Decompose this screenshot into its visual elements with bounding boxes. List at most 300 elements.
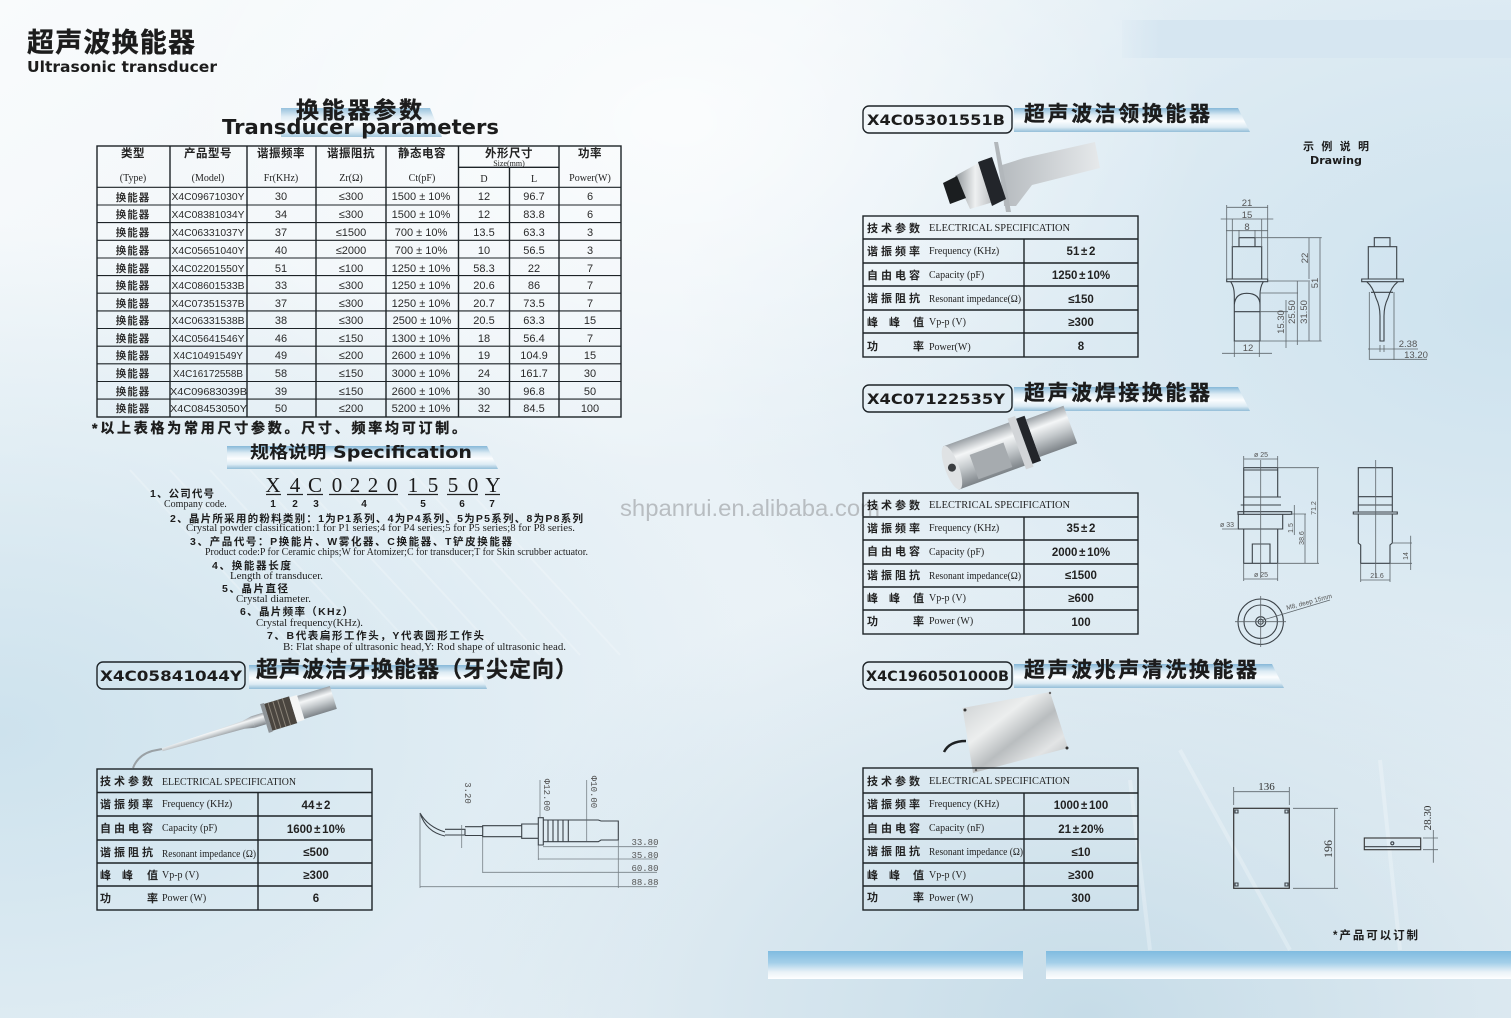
electrical specification table: Vp-p (V): [162, 870, 199, 881]
table rows: 换能器: [116, 297, 150, 310]
electrical specification table: 技术参数: [867, 498, 920, 512]
table rows: 12: [478, 209, 490, 221]
electrical specification table: 技术参数: [867, 221, 920, 235]
dimension drawing: [1221, 198, 1428, 361]
table grid: [97, 146, 621, 417]
electrical specification table: [863, 493, 1138, 634]
table rows: 56.5: [523, 245, 545, 257]
table header: [120, 146, 611, 185]
electrical specification table: Frequency (KHz): [929, 523, 999, 534]
panel: X4C05301551B: [863, 103, 1428, 361]
dimension drawing: [1234, 781, 1438, 888]
model code letters: [265, 473, 501, 497]
table rows: 7: [587, 333, 593, 345]
heading: 超声波洁牙换能器（牙尖定向）: [256, 657, 577, 682]
specification notes: Product code:P for Ceramic chips;W for Atomizer;C for transducer;T for Skin scrubber actuator.: [205, 547, 588, 558]
electrical specification table: 1600 ± 10%: [287, 824, 345, 836]
dimension drawing: 21.6: [1370, 573, 1384, 580]
electrical specification table: [863, 768, 1138, 910]
table rows: 104.9: [520, 350, 548, 362]
model code indexes: 1: [270, 499, 276, 510]
specification notes: 6、晶片频率（KHz）: [240, 605, 353, 618]
model pill: [863, 385, 1012, 412]
watermark: shpanrui.en.alibaba.com: [620, 495, 880, 521]
drawing caption: [1303, 139, 1369, 167]
table header: 外形尺寸: [485, 146, 533, 160]
specification notes: 7、B代表扁形工作头，Y代表圆形工作头: [267, 629, 484, 642]
table rows: 39: [275, 386, 287, 398]
electrical specification table: 技术参数: [100, 774, 153, 788]
electrical specification table: 峰峰值: [867, 315, 924, 329]
dimension drawing: 13.20: [1404, 350, 1428, 361]
model code letters: 4: [290, 473, 301, 497]
model code indexes: 4: [361, 499, 367, 510]
parameters table: [97, 146, 621, 417]
table rows: X4C09671030Y: [172, 191, 244, 203]
dimension drawing: 22: [1300, 253, 1311, 263]
table rows: 50: [584, 386, 596, 398]
table rows: X4C08453050Y: [170, 403, 247, 415]
table rows: 15: [584, 315, 596, 327]
table rows: 46: [275, 333, 287, 345]
heading: 超声波兆声清洗换能器: [1024, 659, 1257, 682]
table rows: 19: [478, 350, 490, 362]
electrical specification table: ≥300: [1068, 870, 1094, 882]
table rows: 100: [581, 403, 599, 415]
electrical specification table: ≤150: [1068, 294, 1094, 306]
dimension drawing: 15: [1242, 210, 1252, 221]
table rows: 换能器: [116, 402, 150, 415]
table rows: 7: [587, 298, 593, 310]
model pill: [97, 662, 245, 689]
table rows: X4C06331037Y: [172, 227, 244, 239]
table rows: 96.8: [523, 386, 545, 398]
electrical specification table: 44 ± 2: [302, 800, 330, 812]
table rows: 86: [528, 280, 540, 292]
table rows: X4C05651040Y: [172, 245, 244, 257]
table rows: 换能器: [116, 279, 150, 292]
title chinese: 超声波换能器: [27, 28, 195, 58]
electrical specification table: 自由电容: [100, 821, 153, 835]
table rows: ≤300: [339, 191, 363, 203]
table rows: X4C05641546Y: [172, 333, 244, 345]
table rows: ≤300: [339, 209, 363, 221]
dimension drawing: [1220, 452, 1412, 647]
table rows: ≤150: [339, 386, 363, 398]
electrical specification table: Vp-p (V): [929, 593, 966, 604]
table rows: 1250 ± 10%: [392, 298, 451, 310]
table rows: ≤1500: [336, 227, 366, 239]
electrical specification table: 谐振频率: [867, 244, 920, 258]
table rows: X4C09683039B: [170, 386, 247, 398]
heading: 超声波焊接换能器: [1024, 382, 1210, 405]
dimension drawing: 136: [1258, 781, 1275, 793]
specification notes: 4、换能器长度: [212, 559, 292, 572]
electrical specification table: 35 ± 2: [1067, 523, 1095, 535]
table rows: 37: [275, 227, 287, 239]
electrical specification table: 1000 ± 100: [1054, 800, 1108, 812]
model code indexes: [270, 499, 495, 510]
table rows: 换能器: [116, 262, 150, 275]
electrical specification table: 谐振阻抗: [867, 844, 920, 858]
table header: Fr(KHz): [264, 173, 298, 184]
table rows: 1250 ± 10%: [392, 280, 451, 292]
heading english: Transducer parameters: [222, 115, 499, 139]
electrical specification table: 8: [1078, 341, 1085, 353]
dimension drawing: 8: [1244, 222, 1250, 233]
dimension drawing: 38.6: [1299, 531, 1306, 545]
photo: welding transducer: [936, 399, 1080, 495]
electrical specification table: ELECTRICAL SPECIFICATION: [929, 500, 1070, 511]
model code breakdown: [265, 473, 501, 510]
table header: Size(mm): [493, 159, 525, 168]
table rows: 换能器: [116, 332, 150, 345]
model code letters: 2: [350, 473, 360, 497]
table rows: 63.3: [523, 227, 545, 239]
model code letters: X: [265, 473, 281, 497]
model code indexes: 7: [489, 499, 495, 510]
model code letters: 0: [468, 473, 478, 497]
table rows: 1500 ± 10%: [392, 209, 451, 221]
dimension drawing: [420, 776, 659, 888]
table rows: ≤300: [339, 298, 363, 310]
table header: 静态电容: [398, 146, 446, 160]
electrical specification table: 100: [1071, 617, 1091, 629]
drawing caption: Drawing: [1310, 154, 1362, 167]
electrical specification table: 自由电容: [867, 268, 920, 282]
table header: Ct(pF): [409, 173, 435, 184]
electrical specification table: ≥300: [1068, 317, 1094, 329]
heading swoosh: [1014, 108, 1250, 132]
electrical specification table: Power (W): [162, 893, 206, 904]
model pill: X4C1960501000B: [866, 669, 1009, 685]
table rows: 32: [478, 403, 490, 415]
table rows: X4C06331538B: [172, 315, 244, 327]
table rows: 换能器: [116, 208, 150, 221]
dimension drawing: 35.80: [631, 851, 659, 861]
electrical specification table: 谐振频率: [100, 797, 153, 811]
table rows: 58.3: [473, 263, 495, 275]
electrical specification table: Capacity (pF): [929, 270, 984, 281]
table rows: 20.6: [473, 280, 495, 292]
table rows: 84.5: [523, 403, 545, 415]
dimension drawing: Φ12.00: [541, 779, 551, 811]
table rows: 30: [275, 191, 287, 203]
dimension drawing: 28.30: [1422, 805, 1434, 830]
table rows: 7: [587, 280, 593, 292]
dimension drawing: M8, deep 15mm: [1286, 593, 1333, 612]
table rows: 换能器: [116, 226, 150, 239]
electrical specification table: Frequency (KHz): [162, 799, 232, 810]
electrical specification table: 21 ± 20%: [1058, 824, 1104, 836]
electrical specification table: ELECTRICAL SPECIFICATION: [929, 776, 1070, 787]
table rows: 1250 ± 10%: [392, 263, 451, 275]
electrical specification table: Capacity (pF): [929, 547, 984, 558]
heading swoosh: [281, 108, 442, 137]
heading swoosh: [1014, 387, 1250, 411]
specification title: 规格说明 Specification: [250, 443, 472, 463]
electrical specification table: ELECTRICAL SPECIFICATION: [162, 777, 296, 788]
electrical specification table: Resonant impedance(Ω): [929, 571, 1021, 582]
specification notes: Company code.: [164, 499, 227, 510]
electrical specification table: ≤10: [1071, 847, 1091, 859]
electrical specification table: ≤1500: [1065, 570, 1097, 582]
electrical specification table: ≥600: [1068, 593, 1094, 605]
electrical specification table: 自由电容: [867, 821, 920, 835]
heading: specification: [227, 443, 498, 469]
model code letters: 5: [448, 473, 458, 497]
table rows: 20.7: [473, 298, 495, 310]
electrical specification table: 峰峰值: [100, 868, 158, 882]
table header: Zr(Ω): [339, 173, 363, 184]
table rows: ≤2000: [336, 245, 366, 257]
table rows: 7: [587, 263, 593, 275]
electrical specification table: 谐振频率: [867, 797, 920, 811]
model pill: X4C05301551B: [867, 113, 1005, 129]
electrical specification table: ELECTRICAL SPECIFICATION: [929, 223, 1070, 234]
electrical specification table: 峰峰值: [867, 868, 924, 882]
panel: X4C1960501000B: [863, 659, 1438, 910]
table rows: 20.5: [473, 315, 495, 327]
model code letters: 5: [428, 473, 438, 497]
model code indexes: 5: [420, 499, 426, 510]
specification notes: B: Flat shape of ultrasonic head,Y: Rod shape of ultrasonic head.: [283, 642, 566, 653]
heading: transducer parameters: [222, 97, 499, 139]
table rows: 49: [275, 350, 287, 362]
dimension drawing: 51: [1310, 278, 1321, 288]
table rows: ≤200: [339, 403, 363, 415]
model code indexes: 2: [292, 499, 298, 510]
model code indexes: 3: [313, 499, 319, 510]
dimension drawing: ø 25: [1254, 572, 1268, 579]
table header: 谐振阻抗: [327, 146, 375, 160]
electrical specification table: ≤500: [303, 847, 329, 859]
model code letters: 0: [387, 473, 397, 497]
table rows: X4C16172558B: [173, 368, 243, 380]
dimension drawing: ø 33: [1220, 522, 1234, 529]
table rows: 2500 ± 10%: [393, 315, 452, 327]
table rows: 83.8: [523, 209, 545, 221]
table rows: 换能器: [116, 314, 150, 327]
table rows: 15: [584, 350, 596, 362]
table rows: ≤300: [339, 280, 363, 292]
photo: plate transducer: [944, 692, 1068, 773]
table rows: 37: [275, 298, 287, 310]
table rows: X4C02201550Y: [172, 263, 244, 275]
table rows: 18: [478, 333, 490, 345]
dimension drawing: 12: [1243, 343, 1253, 354]
dimension drawing: 31.50: [1299, 300, 1310, 324]
table rows: 换能器: [116, 385, 150, 398]
model code letters: 0: [332, 473, 342, 497]
top right pale block: [1122, 20, 1511, 58]
model code letters: 1: [408, 473, 418, 497]
electrical specification table: Resonant impedance(Ω): [929, 294, 1021, 305]
title english: Ultrasonic transducer: [27, 58, 218, 76]
table header: 产品型号: [184, 146, 232, 160]
electrical specification table: Capacity (pF): [162, 823, 217, 834]
specification notes: 2、晶片所采用的粉料类别：1为P1系列、4为P4系列、5为P5系列、8为P8系列: [170, 512, 583, 525]
table rows: 63.3: [523, 315, 545, 327]
table rows: 96.7: [523, 191, 545, 203]
dimension drawing: ø 25: [1254, 452, 1268, 459]
table rows: 50: [275, 403, 287, 415]
model code letters: 2: [368, 473, 378, 497]
table rows: 700 ± 10%: [395, 227, 447, 239]
dimension drawing: 1.5: [1288, 523, 1295, 533]
table rows: 1300 ± 10%: [392, 333, 451, 345]
table rows: 24: [478, 368, 490, 380]
electrical specification table: 51 ± 2: [1067, 246, 1095, 258]
table rows: 34: [275, 209, 287, 221]
electrical specification table: Vp-p (V): [929, 317, 966, 328]
model code indexes: 6: [459, 499, 465, 510]
bottom blue bar right: [1046, 951, 1511, 979]
table rows: 5200 ± 10%: [392, 403, 451, 415]
table header: 类型: [121, 146, 145, 160]
dimension drawing: 15.30: [1276, 310, 1287, 334]
electrical specification table: 300: [1071, 893, 1091, 905]
panel: X4C07122535Y: [863, 382, 1412, 647]
table rows: 2600 ± 10%: [392, 386, 451, 398]
dimension drawing: Φ10.00: [588, 776, 598, 808]
table rows: 161.7: [520, 368, 548, 380]
electrical specification table: 谐振阻抗: [867, 568, 920, 582]
photo: dental scaler: [133, 683, 338, 768]
drawing caption: 示例说明: [1303, 139, 1369, 153]
specification notes: 1、公司代号: [150, 488, 214, 500]
model code letters: Y: [485, 473, 501, 497]
electrical specification table: 功率: [100, 891, 158, 905]
table rows: 换能器: [116, 367, 150, 380]
specification notes: 5、晶片直径: [222, 582, 288, 595]
specification notes: Length of transducer.: [230, 571, 323, 582]
electrical specification table: 功率: [867, 890, 924, 904]
table rows: X4C07351537B: [172, 298, 244, 310]
table rows: 56.4: [523, 333, 545, 345]
bottom blue bar left: [768, 951, 1023, 979]
heading chinese: 换能器参数: [296, 97, 422, 123]
table rows: [116, 191, 599, 415]
dimension drawing: 3.20: [462, 782, 472, 804]
specification notes: Crystal frequency(KHz).: [256, 618, 363, 629]
table rows: ≤150: [339, 368, 363, 380]
table header: (Model): [192, 173, 224, 184]
table rows: 30: [478, 386, 490, 398]
electrical specification table: Power (W): [929, 616, 973, 627]
heading: 超声波洁领换能器: [1024, 103, 1210, 126]
table header: 谐振频率: [257, 146, 305, 160]
specification notes: Crystal powder classification:1 for P1 series;4 for P4 series;5 for P5 series;8 for P8 series.: [186, 523, 575, 534]
dimension drawing: 196: [1321, 840, 1335, 858]
electrical specification table: 2000 ± 10%: [1052, 547, 1110, 559]
dimension drawing: 21: [1242, 198, 1252, 209]
electrical specification table: Resonant impedance (Ω): [929, 847, 1023, 858]
dimension drawing: 71.2: [1311, 501, 1318, 515]
electrical specification table: 谐振阻抗: [100, 845, 153, 859]
table rows: 58: [275, 368, 287, 380]
electrical specification table: 谐振阻抗: [867, 291, 920, 305]
table rows: 6: [587, 209, 593, 221]
model pill: [863, 106, 1012, 133]
model pill: [863, 662, 1012, 689]
table rows: 换能器: [116, 244, 150, 257]
table rows: 40: [275, 245, 287, 257]
electrical specification table: [97, 769, 372, 910]
table rows: ≤100: [339, 263, 363, 275]
electrical specification table: Frequency (KHz): [929, 799, 999, 810]
table rows: 33: [275, 280, 287, 292]
table rows: X4C08601533B: [172, 280, 244, 292]
electrical specification table: 功率: [867, 614, 924, 628]
table rows: 38: [275, 315, 287, 327]
heading swoosh: [249, 665, 487, 689]
table rows: 13.5: [473, 227, 495, 239]
electrical specification table: Capacity (nF): [929, 823, 984, 834]
electrical specification table: Vp-p (V): [929, 870, 966, 881]
custom-order note: *产品可以订制: [1333, 928, 1418, 942]
electrical specification table: 6: [313, 893, 319, 905]
table rows: 6: [587, 191, 593, 203]
table rows: 12: [478, 191, 490, 203]
specification notes: Crystal diameter.: [236, 594, 311, 605]
electrical specification table: 谐振频率: [867, 521, 920, 535]
table rows: ≤150: [339, 333, 363, 345]
table rows: 3: [587, 227, 593, 239]
table footnote: *以上表格为常用尺寸参数。尺寸、频率均可订制。: [92, 420, 466, 436]
model code letters: C: [308, 473, 322, 497]
model pill: X4C07122535Y: [867, 392, 1006, 408]
electrical specification table: 自由电容: [867, 544, 920, 558]
electrical specification table: 功率: [867, 339, 924, 353]
electrical specification table: [863, 216, 1138, 357]
table rows: 22: [528, 263, 540, 275]
specification notes: 3、产品代号：P换能片、W雾化器、C换能器、T铲皮换能器: [190, 535, 512, 548]
dimension drawing: 2.38: [1399, 339, 1417, 350]
electrical specification table: ≥300: [303, 870, 329, 882]
table rows: 10: [478, 245, 490, 257]
table rows: 3000 ± 10%: [392, 368, 451, 380]
dimension drawing: 88.88: [631, 878, 659, 888]
table header: D: [480, 174, 488, 185]
table rows: ≤200: [339, 350, 363, 362]
specification swoosh: [227, 446, 498, 469]
photo: horn transducer: [943, 142, 1100, 212]
model pill: X4C05841044Y: [100, 669, 243, 685]
table header: L: [531, 174, 537, 185]
table header: 功率: [578, 146, 602, 160]
dimension drawing: 60.80: [631, 864, 659, 874]
page title: [27, 28, 218, 76]
heading swoosh: [1014, 664, 1284, 688]
table header: (Type): [120, 173, 146, 184]
table rows: 换能器: [116, 191, 150, 204]
electrical specification table: 1250 ± 10%: [1052, 270, 1110, 282]
electrical specification table: Resonant impedance (Ω): [162, 849, 256, 860]
electrical specification table: 技术参数: [867, 774, 920, 788]
specification notes: [150, 488, 588, 653]
table header: Power(W): [569, 173, 611, 184]
table rows: 换能器: [116, 349, 150, 362]
table rows: 1500 ± 10%: [392, 191, 451, 203]
dimension drawing: 25.50: [1287, 300, 1298, 324]
dimension drawing: 14: [1403, 552, 1410, 560]
electrical specification table: Frequency (KHz): [929, 246, 999, 257]
table rows: ≤300: [339, 315, 363, 327]
table rows: 30: [584, 368, 596, 380]
table rows: 2600 ± 10%: [392, 350, 451, 362]
table rows: X4C10491549Y: [173, 350, 243, 362]
